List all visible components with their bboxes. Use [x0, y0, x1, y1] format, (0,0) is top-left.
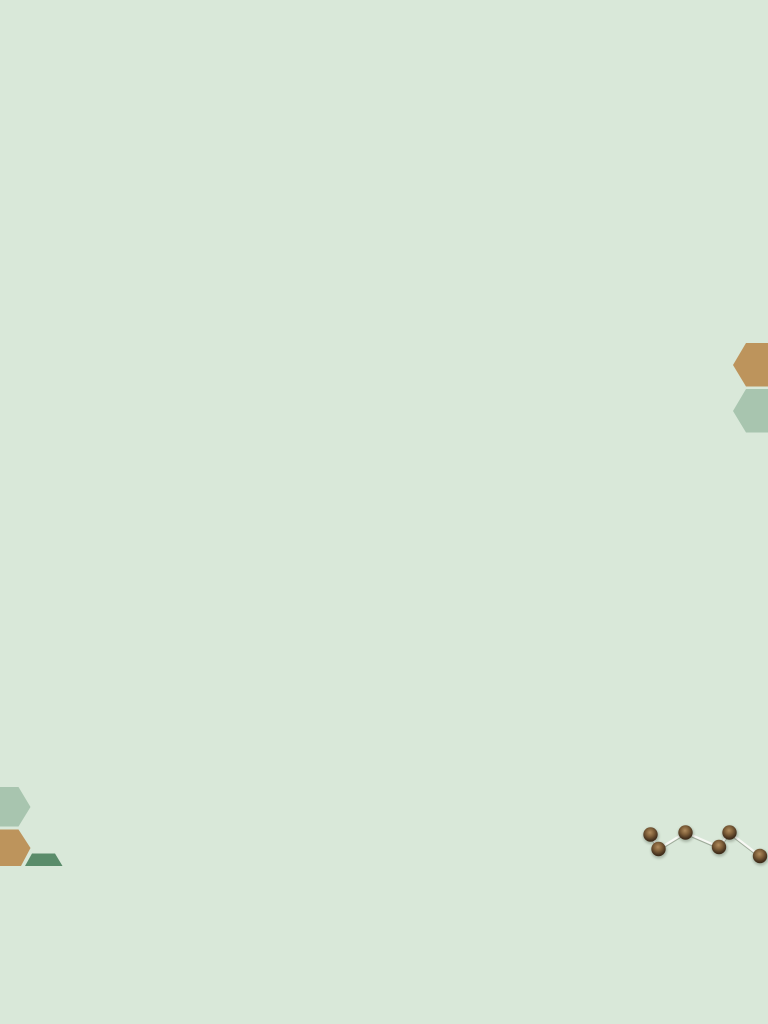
icon: sage hexagon right: [733, 389, 768, 432]
icon: sage hexagon left: [0, 787, 30, 826]
molecule chain: [643, 825, 768, 866]
molecule bonds: [650, 832, 760, 856]
icon: tan hexagon right: [733, 343, 768, 386]
molecule bond shadows: [650, 834, 760, 857]
icon: tan hexagon left: [0, 830, 30, 866]
icon: green hexagon fragment: [25, 854, 62, 866]
molecule atoms: [643, 825, 767, 863]
molecule shadows: [643, 826, 768, 866]
